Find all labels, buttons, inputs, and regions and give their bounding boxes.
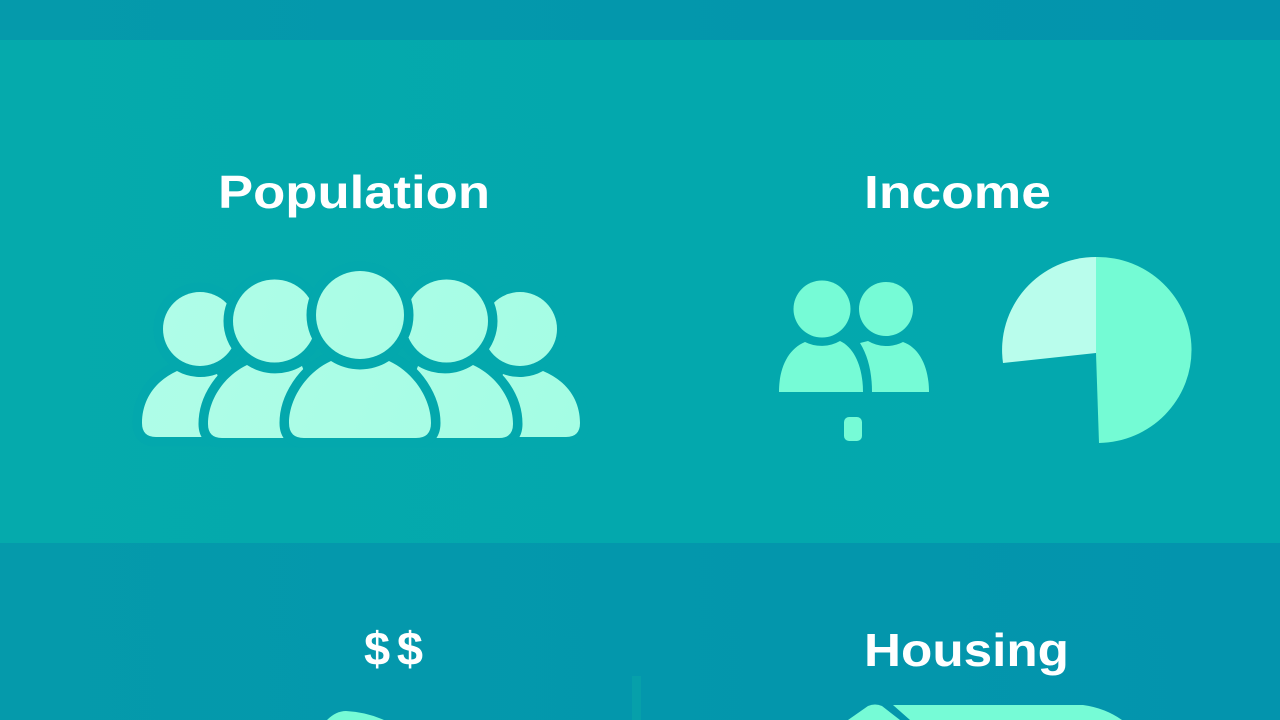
- person: back right: [859, 282, 929, 392]
- heading: $$: $$: [364, 622, 423, 675]
- person: front left: [779, 280, 863, 392]
- heading: Population: Population: [218, 166, 490, 218]
- partial vertical bar: [632, 676, 641, 720]
- person: centre: [289, 271, 431, 438]
- pie slice: pale: [1002, 257, 1096, 363]
- person: far left: [142, 292, 240, 437]
- person: second left: [208, 280, 330, 438]
- icon: two people: [779, 280, 929, 392]
- pie slice: large mint: [1096, 257, 1192, 443]
- icon: partial money shape: [327, 711, 384, 720]
- icon: partial house: [848, 704, 1122, 720]
- icon: group of five people: [142, 271, 580, 438]
- top band: [0, 0, 1280, 40]
- heading: Income: Income: [864, 166, 1051, 218]
- house body: [893, 705, 1122, 720]
- person: far right: [480, 292, 580, 437]
- pie chart: [1002, 257, 1192, 443]
- heading: Housing: Housing: [864, 624, 1069, 676]
- bottom band: [0, 543, 1280, 720]
- person: second right: [390, 280, 513, 438]
- panel: population and income: [0, 40, 1280, 543]
- house roof: [848, 704, 900, 720]
- icon: small rounded square: [844, 417, 862, 441]
